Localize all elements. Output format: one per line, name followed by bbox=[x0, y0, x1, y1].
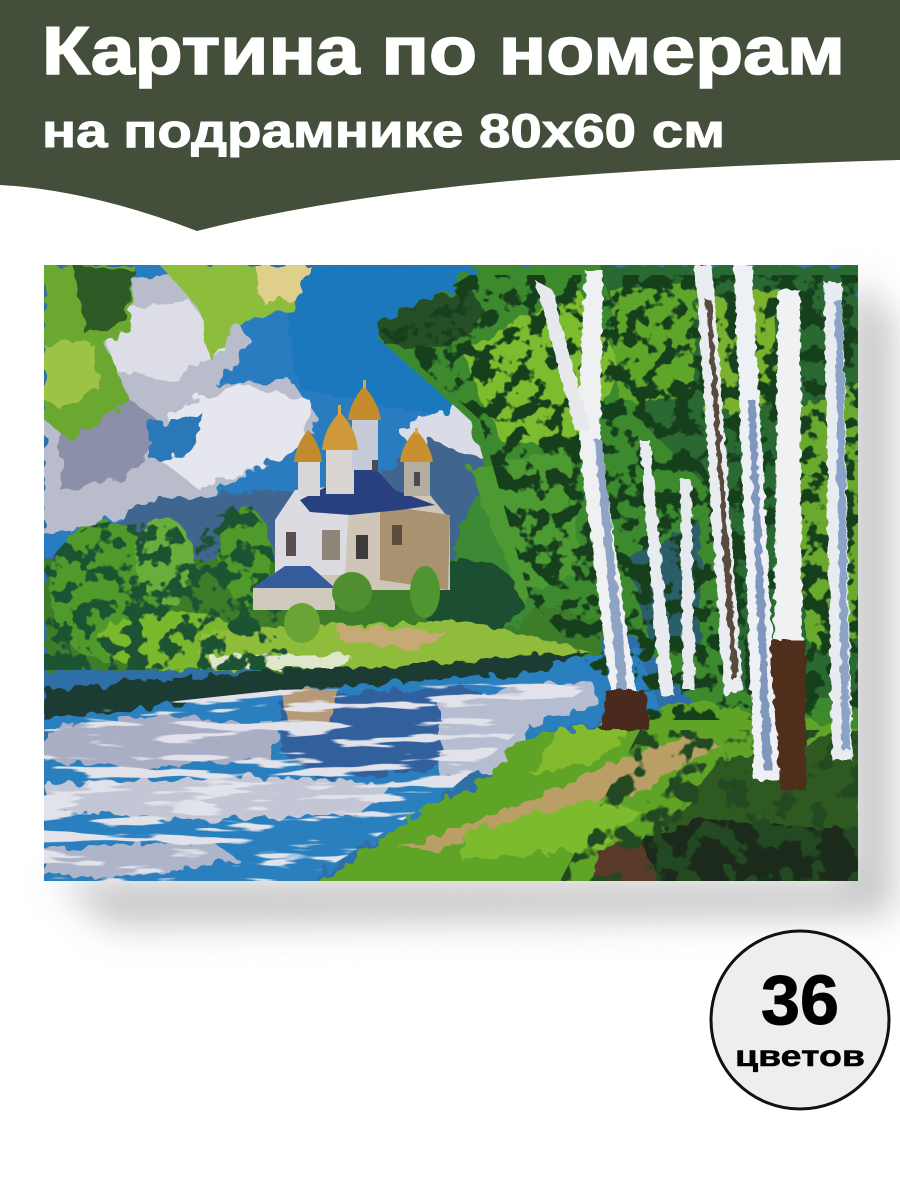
badge: 36 colours: 36 bbox=[761, 961, 839, 1039]
foliage upper left bbox=[44, 265, 310, 440]
canvas drop shadow bbox=[55, 278, 892, 925]
church bbox=[253, 380, 450, 643]
subtitle: на подрамнике 80х60 см bbox=[42, 104, 725, 157]
far bank and trees bbox=[44, 490, 604, 670]
birch trunks bbox=[535, 265, 852, 790]
sky bbox=[44, 265, 484, 562]
foreground mottling bbox=[560, 730, 858, 881]
header banner bbox=[0, 0, 900, 231]
forest dark mottling bbox=[380, 275, 858, 720]
river bbox=[44, 650, 660, 890]
badge: 36 colours: цветов bbox=[735, 1040, 865, 1073]
forest right bbox=[375, 265, 860, 730]
painting bbox=[44, 265, 860, 890]
foreground bank bbox=[320, 700, 858, 881]
far bank mottling bbox=[44, 503, 290, 670]
title: Картина по номерам bbox=[42, 13, 845, 89]
water reflections bbox=[44, 680, 600, 881]
badge: 36 colours bbox=[711, 931, 889, 1109]
